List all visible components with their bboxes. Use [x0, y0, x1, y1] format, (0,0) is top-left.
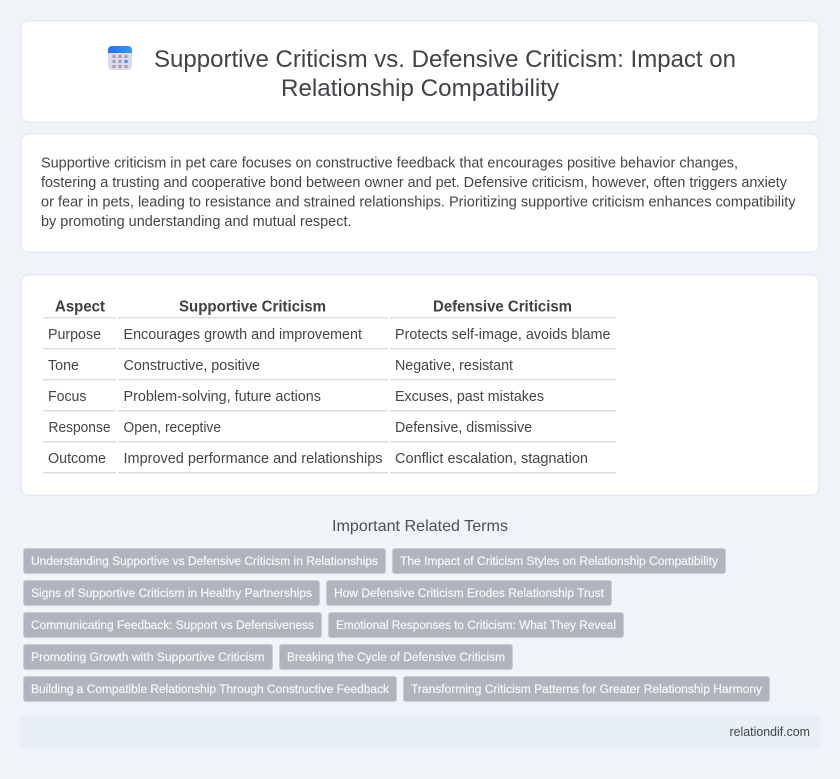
tag: building a compatible relationship: Building a Compatible Relationship Through Constructive Feedback: [31, 682, 390, 696]
table row: response: Defensive, dismissive: [395, 420, 532, 436]
text block: introduction paragraph: fostering a trusting and cooperative bond between owner and pet. Defensive criticism, however, often triggers anxiety: [41, 175, 788, 191]
tag: understanding: [24, 548, 386, 574]
table header row: Defensive Criticism: [433, 298, 572, 316]
table row: tone: Tone: [48, 358, 79, 374]
text block: introduction paragraph: [41, 156, 796, 230]
tag: defensive criticism erodes trust: How Defensive Criticism Erodes Relationship Trust: [334, 586, 605, 600]
panel: introduction: [21, 134, 819, 252]
tag: building a compatible relationship: [24, 676, 396, 702]
table row: response: Open, receptive: [124, 420, 221, 436]
table header row: Supportive Criticism: [179, 298, 326, 316]
tag: signs of supportive criticism: Signs of Supportive Criticism in Healthy Partnerships: [31, 586, 312, 600]
panel: header: [21, 21, 819, 122]
tag: emotional responses: [328, 612, 624, 638]
footer: relationdif.com: [730, 725, 810, 739]
tag: understanding: Understanding Supportive vs Defensive Criticism in Relationships: [31, 554, 378, 568]
text block: introduction paragraph: or fear in pets, leading to resistance and strained relationships. Prioritizing supportive criticism enhances compatibility: [41, 194, 796, 210]
table row: focus: [48, 389, 544, 405]
panel: related term tags: [24, 548, 770, 702]
footer: [20, 715, 820, 749]
table row: focus: Problem-solving, future actions: [124, 389, 321, 405]
table header row: Aspect: [55, 298, 105, 316]
icon: calendar: [108, 46, 132, 70]
table row: outcome: [48, 451, 588, 467]
table row: response: [48, 420, 532, 436]
title: Supportive Criticism vs. Defensive Criticism: Impact on: [154, 46, 736, 73]
tag: defensive criticism erodes trust: [326, 580, 612, 606]
tag: breaking the cycle: Breaking the Cycle of Defensive Criticism: [287, 650, 505, 664]
table row: purpose: Encourages growth and improvement: [124, 327, 362, 343]
tag: transforming criticism patterns: Transforming Criticism Patterns for Greater Relationship Harmony: [411, 682, 763, 696]
table row: focus: Focus: [48, 389, 86, 405]
title: [154, 46, 736, 102]
tag: signs of supportive criticism: [24, 580, 320, 606]
table row: tone: [48, 358, 513, 374]
tag: impact of criticism styles: The Impact of Criticism Styles on Relationship Compatibility: [400, 554, 719, 568]
tag: impact of criticism styles: [392, 548, 726, 574]
table row: outcome: Improved performance and relationships: [124, 451, 382, 467]
tag: transforming criticism patterns: [404, 676, 770, 702]
text block: introduction paragraph: by promoting understanding and mutual respect.: [41, 214, 352, 230]
table row: tone: Negative, resistant: [395, 358, 513, 374]
table row: tone: Constructive, positive: [124, 358, 260, 374]
table row: focus: Excuses, past mistakes: [395, 389, 544, 405]
panel: comparison table: [21, 275, 819, 495]
tag: communicating feedback: Communicating Feedback: Support vs Defensiveness: [31, 618, 314, 632]
table row: outcome: Outcome: [48, 451, 106, 467]
table row: purpose: [48, 327, 610, 343]
tag: breaking the cycle: [280, 644, 512, 670]
table header row: [55, 298, 572, 316]
table row: outcome: Conflict escalation, stagnation: [395, 451, 588, 467]
tag: promoting growth: Promoting Growth with Supportive Criticism: [31, 650, 264, 664]
tag: promoting growth: [24, 644, 272, 670]
title: Relationship Compatibility: [281, 75, 559, 102]
tag: emotional responses: Emotional Responses to Criticism: What They Reveal: [336, 618, 616, 632]
tag: communicating feedback: [24, 612, 322, 638]
table row: purpose: Purpose: [48, 327, 101, 343]
text block: introduction paragraph: Supportive criticism in pet care focuses on constructive feedback that encourages positive behavior changes,: [41, 156, 738, 172]
heading: important related terms: Important Related Terms: [332, 518, 508, 535]
table row: response: Response: [48, 420, 110, 436]
table row: purpose: Protects self-image, avoids blame: [395, 327, 610, 343]
